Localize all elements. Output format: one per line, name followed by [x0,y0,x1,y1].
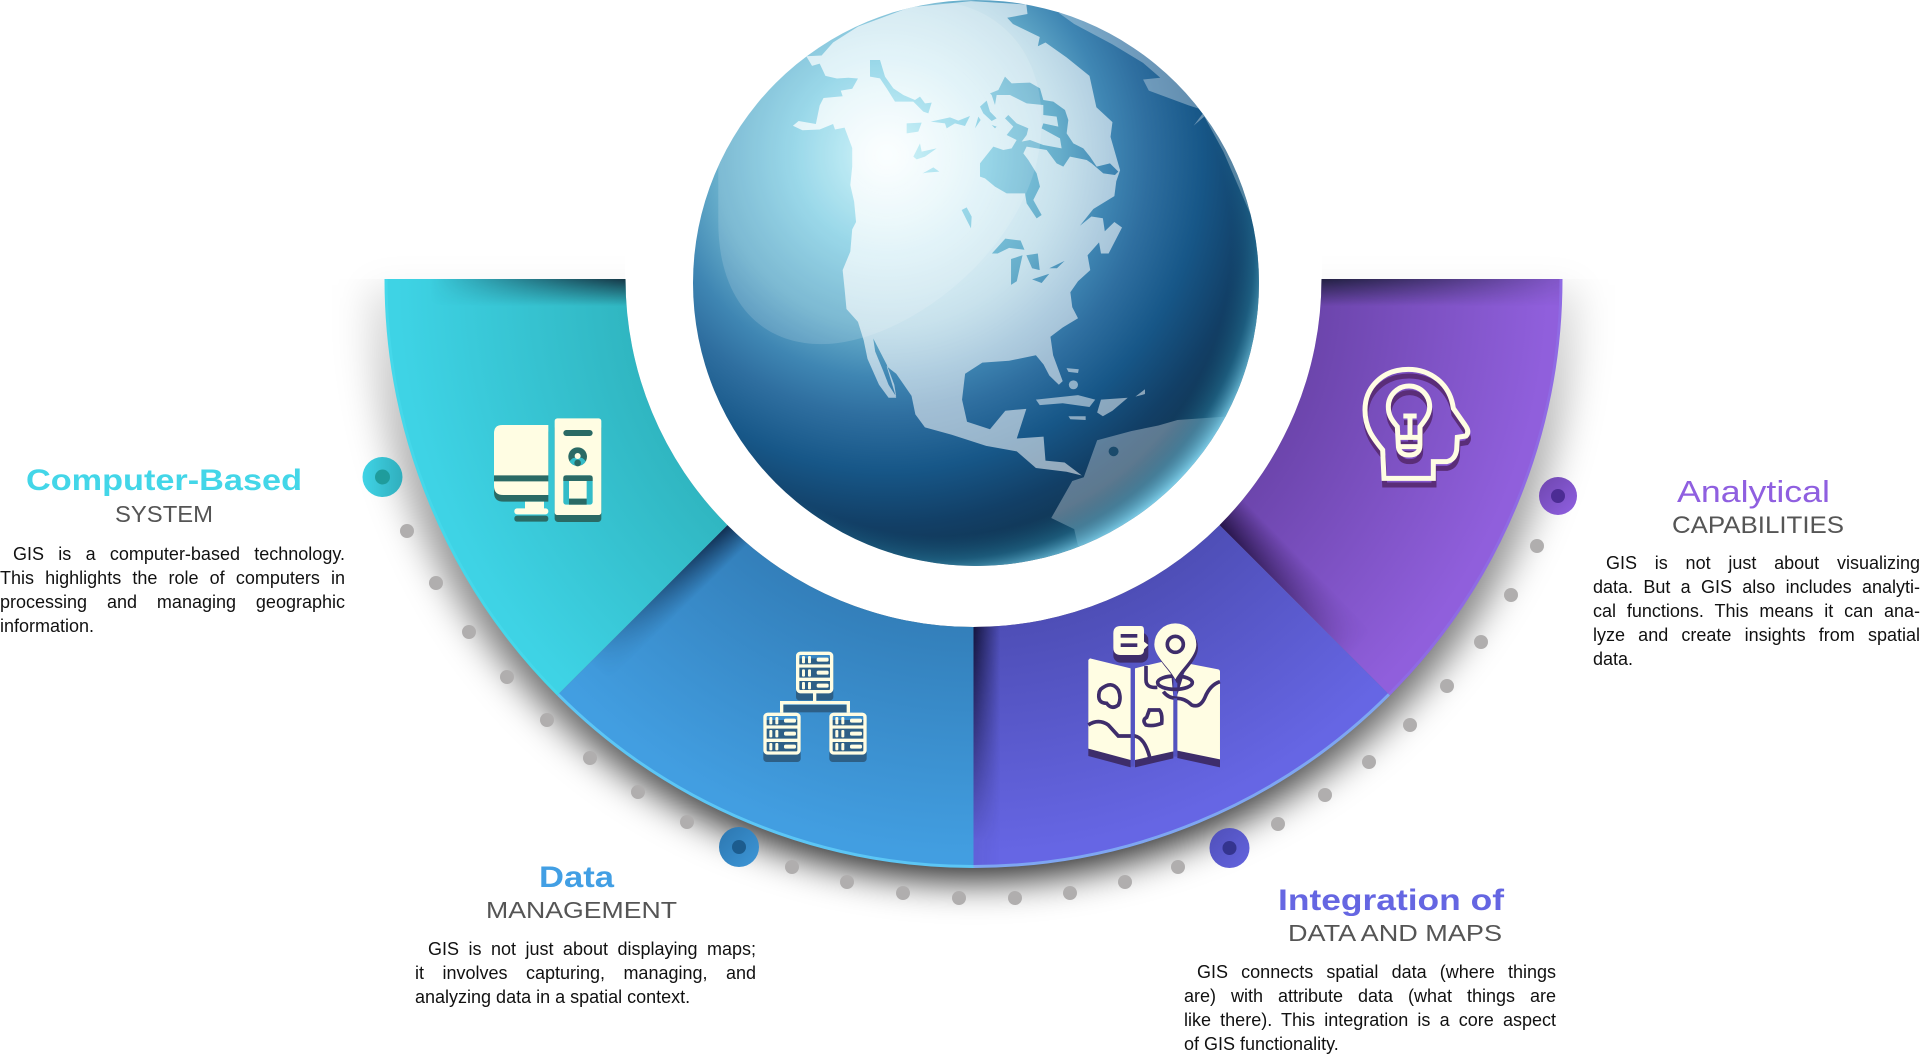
text block: Analytical description [1593,553,1920,669]
icon: computer [494,418,601,522]
heading: Analytical Capabilities: CAPABILITIES [1672,512,1844,539]
text block: Data Management description [415,939,756,1007]
heading: Integration of Data and Maps: DATA AND MAPS [1288,920,1502,946]
segment: Integration of Data and Maps [974,525,1389,866]
segment: Analytical Capabilities [1220,279,1561,694]
text block: Computer-Based description: information. [0,616,94,636]
text block: Data Management description: GIS is not just about displaying maps; [428,939,756,959]
text block: Computer-Based description [0,544,345,636]
text block: Integration description: GIS connects spatial data (where things [1197,962,1556,982]
globe [690,0,1277,570]
text block: Computer-Based description: This highlights the role of computers in [0,568,345,588]
heading: Computer-Based System [26,464,302,527]
text block: Integration description [1184,962,1556,1054]
heading: Computer-Based System: Computer-Based [26,464,302,497]
heading: Integration of Data and Maps [1278,884,1505,946]
heading: Analytical Capabilities: Analytical [1677,474,1830,509]
text block: Computer-Based description: GIS is a computer-based technology. [13,544,345,564]
heading: Integration of Data and Maps: Integration of [1278,884,1505,917]
text block: Integration description: of GIS functionality. [1184,1034,1339,1054]
marker dot: Data [719,827,759,867]
heading: Data Management [486,861,677,923]
segment: Computer-Based System [386,279,727,694]
marker dot: Computer-Based [362,457,402,497]
text block: Analytical description: data. [1593,649,1633,669]
marker dot: Integration [1210,828,1250,868]
text block: Computer-Based description: processing and managing geographic [0,592,345,612]
text block: Data Management description: it involves capturing, managing, and [415,963,756,983]
text block: Analytical description: lyze and create insights from spatial [1593,625,1920,645]
icon: map with location pin [1088,623,1220,767]
text block: Analytical description: data. But a GIS also includes analyti- [1593,577,1920,597]
heading: Computer-Based System: SYSTEM [115,501,213,527]
heading: Analytical Capabilities [1672,474,1844,539]
ring drop shadow [300,0,1650,880]
marker dot: Analytical [1539,477,1577,515]
dotted arc of grey dots [400,524,1544,905]
segment: Data Management [558,525,974,866]
heading: Data Management: Data [539,861,614,894]
text block: Integration description: like there). This integration is a core aspect [1184,1010,1556,1030]
heading: Data Management: MANAGEMENT [486,897,677,923]
text block: Analytical description: cal functions. This means it can ana- [1593,601,1920,621]
text block: Data Management description: analyzing data in a spatial context. [415,987,690,1007]
text block: Analytical description: GIS is not just about visualizing [1606,553,1920,573]
icon: server network [763,653,867,762]
icon: head with light bulb [1365,369,1468,485]
text block: Integration description: are) with attribute data (what things are [1184,986,1556,1006]
